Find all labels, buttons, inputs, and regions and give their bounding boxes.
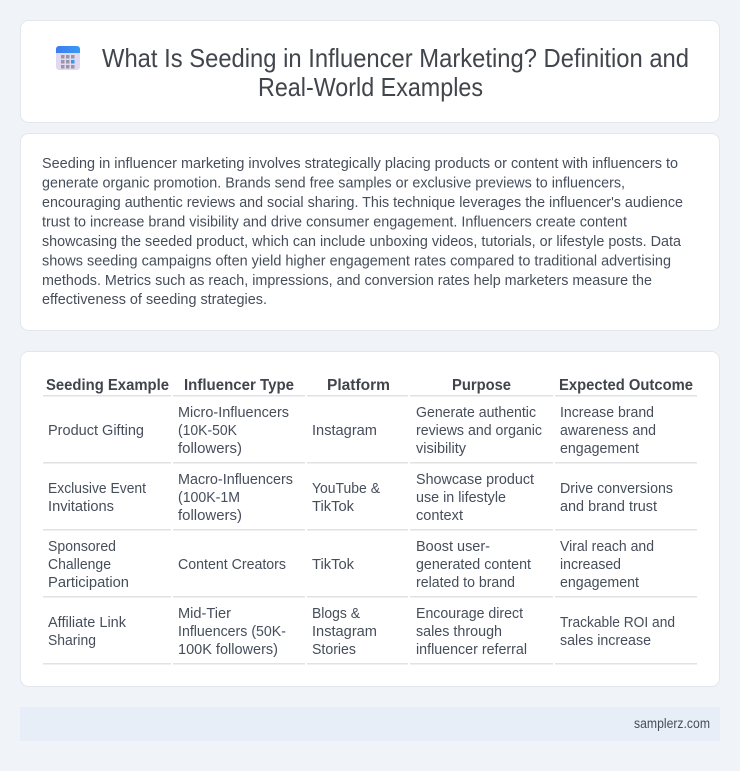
table row: sponsored challenge participation: engagement [560,575,639,591]
icon: calendar [56,46,80,70]
text block: definition: shows seeding campaigns often yield higher engagement rates compared to traditional advertising [42,254,671,270]
table row: affiliate link sharing: Mid-Tier [178,606,231,622]
table row: product gifting [48,405,656,457]
table row: affiliate link sharing: Trackable ROI and [560,615,675,631]
table header: Seeding Example [46,377,169,394]
table row: exclusive event invitations: use in lifestyle [416,490,506,506]
text block: definition: showcasing the seeded product, which can include unboxing videos, tutorials, or lifestyle posts. Data [42,234,682,250]
title [102,43,689,102]
table header: Influencer Type [184,377,294,394]
table header: Purpose [452,377,511,394]
text block: definition: generate organic promotion. Brands send free samples or exclusive previews to influencers, [42,176,625,192]
table row: affiliate link sharing: sales increase [560,633,651,649]
table row: product gifting: engagement [560,441,639,457]
table header: Expected Outcome [559,377,693,394]
table row: affiliate link sharing: 100K followers) [178,642,278,658]
table row: affiliate link sharing [48,606,675,658]
table row: exclusive event invitations: Showcase product [416,472,534,488]
table row: product gifting: reviews and organic [416,423,542,439]
table row: sponsored challenge participation: Viral reach and [560,539,654,555]
panel: title card [20,20,720,122]
table row: affiliate link sharing: sales through [416,624,502,640]
panel: table card [20,352,720,686]
table row: exclusive event invitations: YouTube & [312,481,380,497]
table row: exclusive event invitations: and brand trust [560,499,657,515]
table row: sponsored challenge participation [48,539,654,591]
table row: sponsored challenge participation: Boost user- [416,539,490,555]
table row: affiliate link sharing: Influencers (50K- [178,624,286,640]
table row: product gifting: awareness and [560,423,656,439]
table row: exclusive event invitations [48,472,673,524]
table row: exclusive event invitations: (100K-1M [178,490,240,506]
table row: sponsored challenge participation: Sponsored [48,539,116,555]
table row: affiliate link sharing: Blogs & [312,606,360,622]
table row: sponsored challenge participation: increased [560,557,621,573]
table row: product gifting: visibility [416,441,467,457]
table row: product gifting: followers) [178,441,242,457]
table row: exclusive event invitations: Exclusive Event [48,481,146,497]
title: Real-World Examples [258,72,483,102]
footer [20,707,720,741]
table header: Platform [327,377,390,394]
table row: product gifting: Micro-Influencers [178,405,289,421]
table row: exclusive event invitations: context [416,508,463,524]
table row: affiliate link sharing: Affiliate Link [48,615,127,631]
table row: product gifting: (10K-50K [178,423,237,439]
table row: exclusive event invitations: TikTok [312,499,355,515]
table row: product gifting: Generate authentic [416,405,536,421]
text block: definition: methods. Metrics such as reach, impressions, and conversion rates help marketers measure the [42,273,652,289]
footer: samplerz.com [634,716,710,731]
table row: sponsored challenge participation: related to brand [416,575,515,591]
table row: exclusive event invitations: Macro-Influencers [178,472,293,488]
table row: exclusive event invitations: Drive conversions [560,481,673,497]
table row: exclusive event invitations: Invitations [48,499,114,515]
text block: definition: trust to increase brand visibility and drive consumer engagement. Influencers create content [42,214,627,230]
text block: definition: Seeding in influencer marketing involves strategically placing products or content with influencers to [42,156,678,172]
table row: product gifting: Product Gifting [48,423,144,439]
panel: definition text [20,134,720,330]
table row: sponsored challenge participation: Participation [48,575,129,591]
table row: sponsored challenge participation: TikTok [312,557,355,573]
text block: definition [42,156,683,308]
table row: affiliate link sharing: Encourage direct [416,606,523,622]
table row: sponsored challenge participation: generated content [416,557,531,573]
table row: affiliate link sharing: Stories [312,642,356,658]
table row: sponsored challenge participation: Challenge [48,557,111,573]
text block: definition: effectiveness of seeding strategies. [42,292,267,308]
title: What Is Seeding in Influencer Marketing? Definition and [102,43,689,73]
table row: product gifting: Instagram [312,423,377,439]
table row: affiliate link sharing: Instagram [312,624,377,640]
table row: exclusive event invitations: followers) [178,508,242,524]
text block: definition: encouraging authentic reviews and social sharing. This technique leverages the influencer's audience [42,195,683,211]
table row: sponsored challenge participation: Content Creators [178,557,286,573]
table row: affiliate link sharing: influencer referral [416,642,527,658]
table header [46,377,693,394]
table row: affiliate link sharing: Sharing [48,633,96,649]
table row: product gifting: Increase brand [560,405,654,421]
